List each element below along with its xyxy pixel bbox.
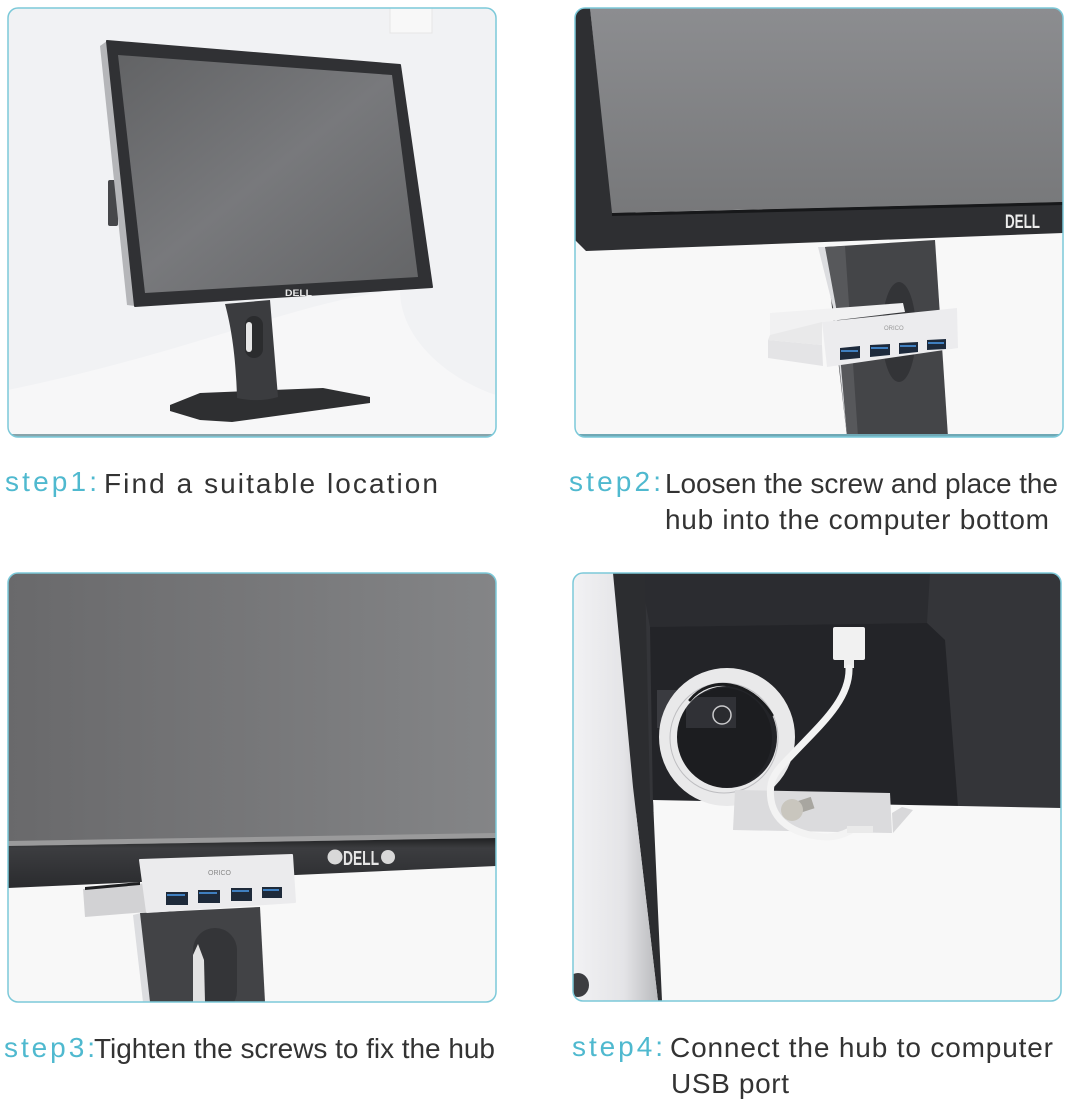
- caption: step 3: step3:: [4, 1032, 95, 1063]
- logo: DELL: [285, 288, 313, 298]
- hub front: [140, 855, 295, 912]
- caption: step 1: step1:: [5, 466, 97, 497]
- dark strip by stand: [613, 573, 662, 1001]
- monitor bezel: [107, 41, 432, 306]
- USB plug: [833, 627, 865, 660]
- panel: step 3 photo, hub tightened on monitor: [8, 573, 496, 1013]
- caption: step 2: step2:: [569, 466, 661, 497]
- stand notch: [574, 973, 589, 997]
- caption: step 1: Find a suitable location: [104, 468, 438, 499]
- USB ports: [840, 339, 946, 360]
- brand logo: DELL: [343, 848, 379, 870]
- caption: step 4: Connect the hub to computer: [670, 1032, 1053, 1063]
- label sticker: [657, 690, 710, 728]
- monitor stand: [225, 300, 278, 400]
- icon: wall socket: [390, 8, 432, 33]
- hub front: [822, 308, 958, 367]
- hub body: [733, 790, 892, 833]
- caption: step 4: step4:: [572, 1031, 663, 1062]
- cable coil: [668, 677, 786, 797]
- stand: [825, 240, 948, 437]
- screen: [8, 573, 496, 846]
- bezel: [8, 838, 496, 888]
- cable to hub: [770, 668, 850, 837]
- caption: step 2: Loosen the screw and place the: [665, 468, 1058, 499]
- panel: step 4 photo, cable connected behind monitor: [567, 573, 1061, 1001]
- monitor side button: [108, 180, 118, 226]
- panel: step 1 photo, monitor on stand: [8, 8, 496, 437]
- caption: step 4: USB port: [671, 1068, 789, 1099]
- screen: [590, 8, 1063, 213]
- hub arm: [892, 807, 913, 833]
- monitor silver edge: [100, 41, 135, 306]
- monitor screen: [118, 55, 418, 293]
- USB ports: [166, 887, 282, 905]
- panel: step 2 photo, hub placed under monitor: [575, 8, 1063, 437]
- hub connector: [847, 826, 873, 833]
- monitor back: [612, 573, 1061, 813]
- coil inner background: [676, 688, 772, 788]
- bezel: [575, 8, 1063, 251]
- caption: step 4: [572, 1031, 1053, 1099]
- hub rear arm: [832, 303, 905, 321]
- brand text: DELL: [1005, 212, 1040, 233]
- brand logo: [328, 850, 395, 865]
- certification mark: [713, 706, 731, 724]
- hub rear arm: [83, 883, 147, 917]
- hub brand: ORICO: [208, 870, 232, 877]
- monitor base: [170, 388, 370, 422]
- white stand: [573, 573, 658, 1001]
- hub brand: ORICO: [884, 326, 904, 332]
- white shelf: [653, 800, 1060, 813]
- caption: step 3: Tighten the screws to fix the hub: [94, 1033, 495, 1064]
- caption: step 2: hub into the computer bottom: [665, 504, 1049, 535]
- stand cable hole: [245, 316, 263, 358]
- caption: step 2: [569, 466, 1058, 535]
- stand: [133, 913, 150, 1002]
- screw: [781, 797, 814, 821]
- sticker inside coil: [686, 697, 736, 728]
